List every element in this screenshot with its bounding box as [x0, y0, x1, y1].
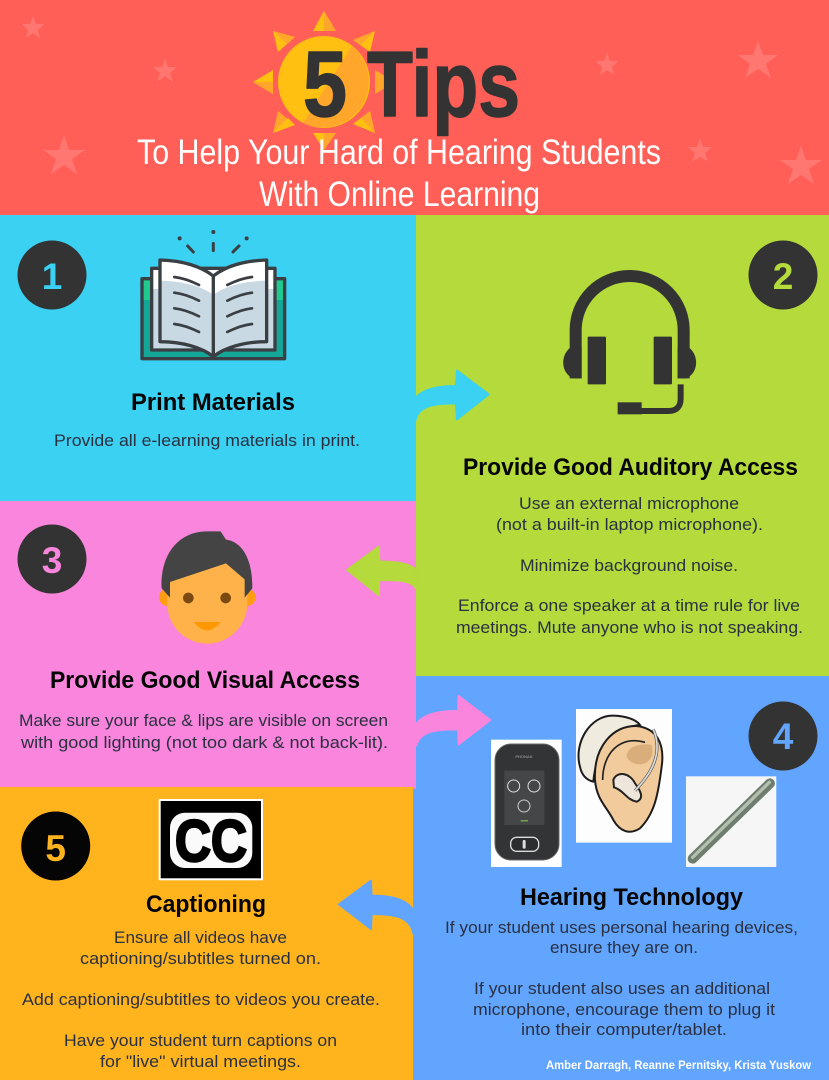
- icon: closed captions: CC: [175, 809, 247, 874]
- image: pen microphone: [686, 776, 776, 867]
- subtitle: To Help Your Hard of Hearing Students: [137, 133, 661, 172]
- panel: tip 1 print materials: [0, 215, 416, 501]
- icon: face: [159, 531, 256, 644]
- icon: headset: [563, 276, 696, 414]
- body text: [445, 918, 798, 1039]
- body text: If your student uses personal hearing devices,: [445, 918, 798, 937]
- subtitle: With Online Learning: [259, 175, 540, 214]
- body text: Provide all e-learning materials in print.: [54, 431, 360, 450]
- body text: Ensure all videos have: [114, 928, 287, 947]
- arrow: tip 1 to tip 2: [416, 371, 489, 420]
- number badge 1: 1: [42, 256, 62, 297]
- body text: into their computer/tablet.: [521, 1020, 727, 1039]
- title word: Tips: [367, 32, 520, 136]
- panel: header: [0, 0, 829, 215]
- number badge 5: 5: [45, 828, 66, 869]
- body text: [19, 711, 388, 752]
- image: remote microphone device: PHONAK: [515, 754, 533, 759]
- arrow: tip 4 to tip 5: [339, 881, 413, 933]
- body text: Use an external microphone: [519, 494, 739, 513]
- number badge 3: [18, 524, 86, 594]
- heading: hearing technology: Hearing Technology: [520, 884, 744, 911]
- panel: tip 3 visual access: [0, 501, 416, 789]
- arrow: tip 3 to tip 4: [417, 696, 490, 745]
- icon: sun: [253, 11, 395, 150]
- body text: If your student also uses an additional: [474, 979, 770, 998]
- number badge 5: [21, 812, 90, 880]
- subtitle: [137, 133, 661, 214]
- number badge 2: 2: [773, 256, 793, 297]
- number badge 1: [18, 240, 86, 310]
- body text: microphone, encourage them to plug it: [473, 1000, 775, 1019]
- panel: tip 5 captioning: [0, 787, 413, 1080]
- body text: Minimize background noise.: [520, 556, 738, 575]
- body text: Have your student turn captions on: [64, 1031, 337, 1050]
- body text: meetings. Mute anyone who is not speaking.: [456, 618, 803, 637]
- panel: tip 2 auditory access: [416, 215, 829, 676]
- body text: Add captioning/subtitles to videos you create.: [22, 990, 380, 1009]
- credits: Amber Darragh, Reanne Pernitsky, Krista Yuskow: [546, 1058, 812, 1072]
- number badge 4: 4: [773, 716, 794, 757]
- body text: [22, 928, 380, 1071]
- heading: visual access: Provide Good Visual Access: [50, 667, 360, 694]
- heading: auditory access: Provide Good Auditory Access: [463, 454, 798, 481]
- body text: [456, 494, 803, 637]
- number badge 4: [748, 702, 818, 770]
- body text: (not a built-in laptop microphone).: [496, 515, 763, 534]
- icon: closed captions: [159, 799, 263, 880]
- body text: Make sure your face & lips are visible on screen: [19, 711, 388, 730]
- body text: with good lighting (not too dark & not back-lit).: [20, 733, 388, 752]
- heading: print materials: Print Materials: [131, 389, 295, 416]
- title number: 5: [303, 32, 347, 136]
- body text: for "live" virtual meetings.: [100, 1052, 301, 1071]
- body text: ensure they are on.: [550, 938, 698, 957]
- panel: tip 4 hearing technology: [413, 676, 829, 1080]
- image: ear with hearing aid: [576, 709, 672, 843]
- number badge 3: 3: [42, 540, 62, 581]
- heading: captioning: Captioning: [146, 891, 266, 918]
- image: remote microphone device: [491, 740, 562, 867]
- icon: open book: [142, 230, 285, 359]
- decorative stars: [22, 16, 822, 184]
- body text: captioning/subtitles turned on.: [80, 949, 321, 968]
- number badge 2: [748, 240, 818, 310]
- arrow: tip 2 to tip 3: [347, 547, 416, 595]
- body text: Enforce a one speaker at a time rule for live: [458, 596, 800, 615]
